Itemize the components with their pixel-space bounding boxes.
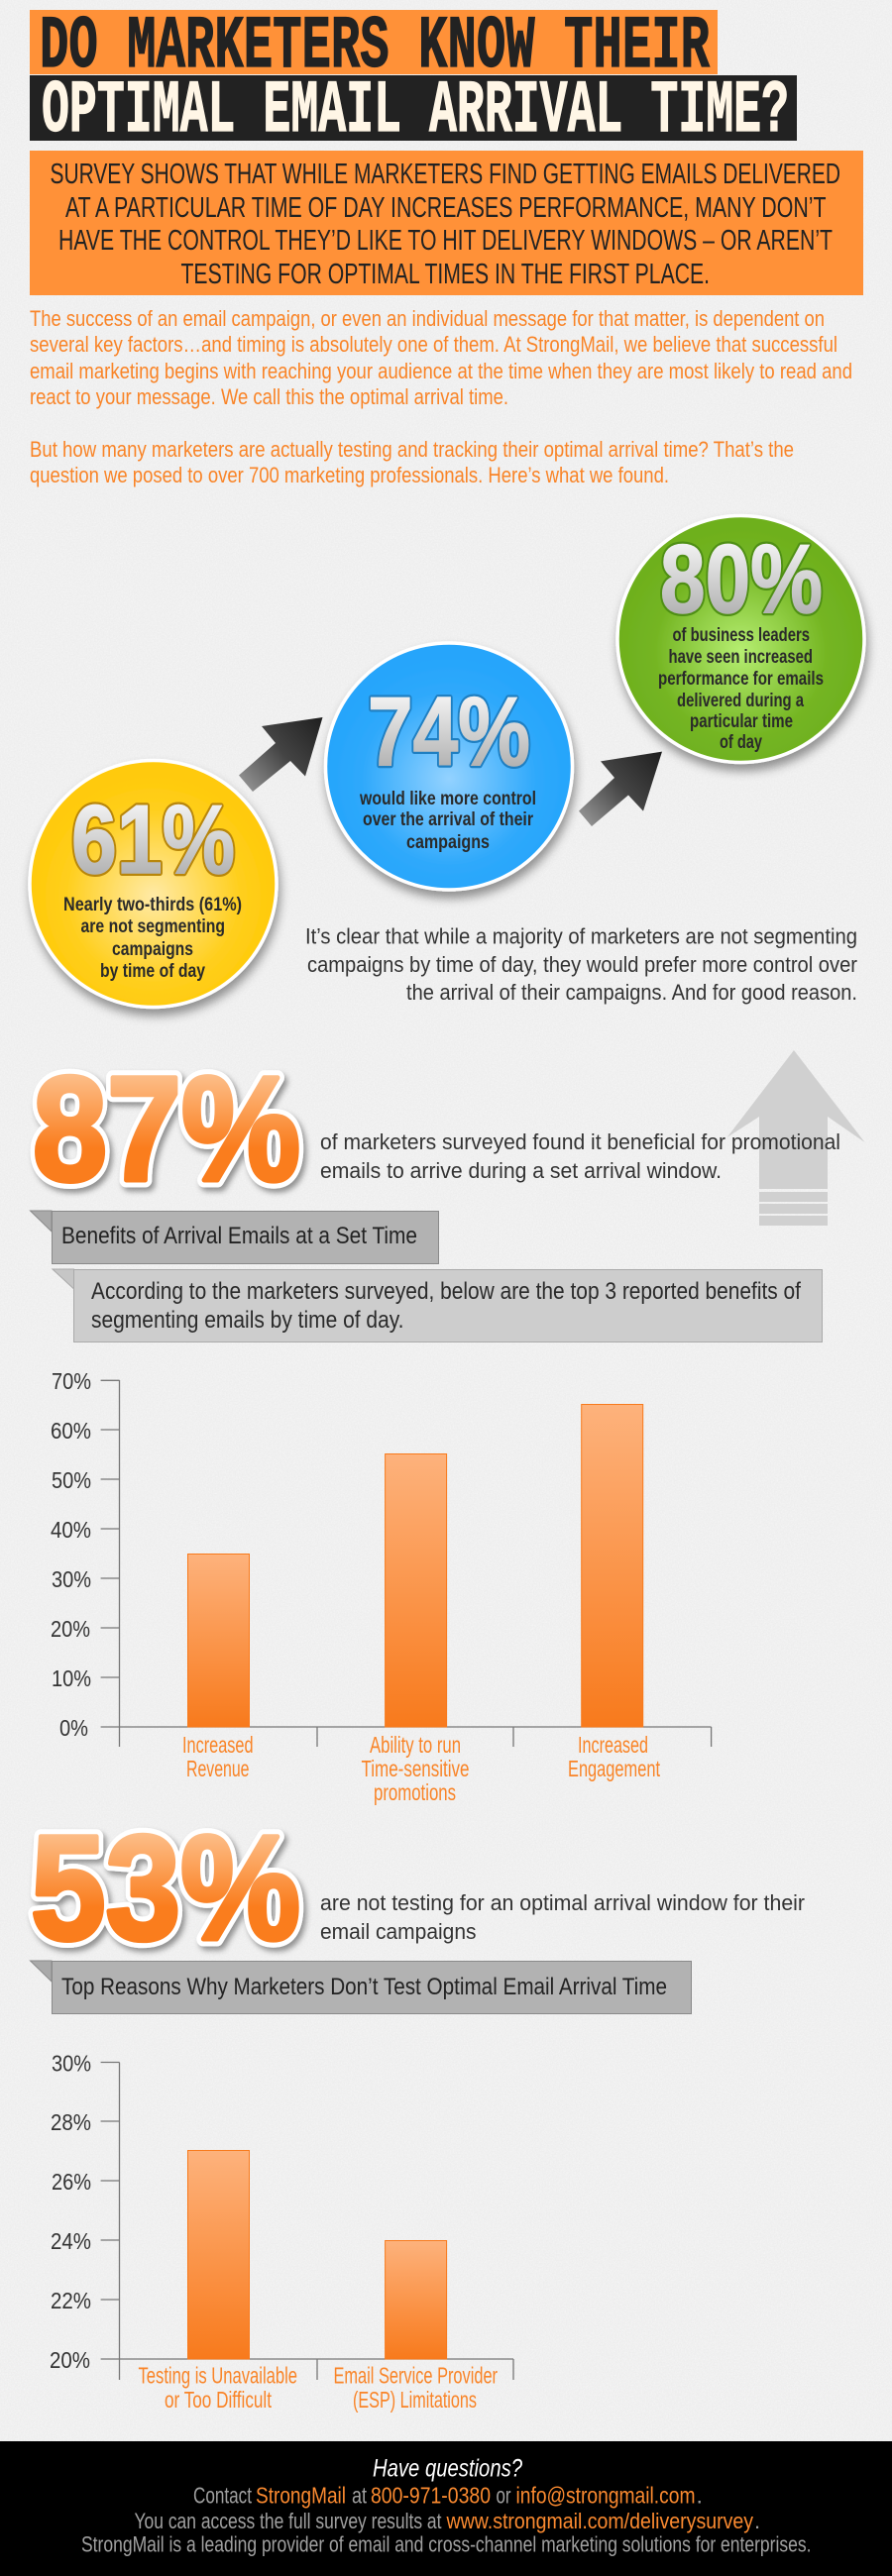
circle: 74%: over the arrival of their bbox=[363, 809, 534, 830]
bar: time-sensitive promotions 55% bbox=[386, 1454, 447, 1727]
intro text bbox=[30, 306, 852, 487]
y labels bbox=[50, 2051, 91, 2373]
arrow: blue to green bbox=[579, 752, 662, 826]
circle: 80%: of day bbox=[720, 732, 762, 753]
y labels: 40% bbox=[51, 1517, 91, 1543]
x labels: Ability to run bbox=[370, 1732, 461, 1758]
y labels: 30% bbox=[52, 1566, 91, 1592]
circle: 61%: 61% bbox=[71, 785, 235, 894]
footer bbox=[0, 2441, 892, 2576]
x labels: Engagement bbox=[568, 1756, 660, 1781]
y labels: 30% bbox=[52, 2051, 91, 2077]
intro text: question we posed to over 700 marketing professionals. Here’s what we found. bbox=[30, 463, 669, 487]
y labels: 28% bbox=[51, 2109, 91, 2135]
stat 53% text: are not testing for an optimal arrival window for their bbox=[320, 1890, 805, 1915]
title bbox=[30, 5, 797, 154]
stat: 53%: 53% bbox=[31, 1804, 300, 1971]
axes bbox=[101, 2063, 513, 2380]
ribbon text: according: segmenting emails by time of day. bbox=[91, 1307, 404, 1334]
footer survey line: www.strongmail.com/deliverysurvey bbox=[446, 2509, 753, 2533]
y labels: 50% bbox=[52, 1467, 91, 1493]
subtitle panel: TESTING FOR OPTIMAL TIMES IN THE FIRST PLACE. bbox=[180, 259, 710, 290]
bar chart: benefits bbox=[51, 1368, 712, 1805]
x labels: Time-sensitive bbox=[361, 1756, 470, 1781]
y labels bbox=[51, 1368, 91, 1741]
circle: 74%: 74% bbox=[368, 677, 530, 786]
footer contact line: StrongMail bbox=[256, 2483, 346, 2509]
subtitle panel bbox=[30, 151, 863, 295]
footer heading: Have questions? bbox=[373, 2455, 522, 2483]
x labels: Increased bbox=[182, 1732, 254, 1758]
x labels: Testing is Unavailable bbox=[139, 2362, 297, 2388]
bar: increased revenue 35% bbox=[188, 1554, 250, 1727]
intro text: react to your message. We call this the optimal arrival time. bbox=[30, 384, 508, 409]
footer contact line: Contact bbox=[193, 2483, 252, 2509]
axes bbox=[101, 1380, 712, 1747]
bar chart: reasons bbox=[50, 2051, 513, 2413]
stat: 87%: 87% bbox=[33, 1045, 300, 1212]
commentary text bbox=[305, 923, 857, 1005]
y labels: 20% bbox=[50, 2347, 90, 2373]
circle: 61%: campaigns bbox=[112, 939, 193, 960]
circle: 61%: are not segmenting bbox=[81, 916, 225, 937]
circle: 80%: 80% bbox=[660, 524, 823, 633]
ribbon text: according: According to the marketers surveyed, below are the top 3 reported benefits of bbox=[91, 1278, 801, 1305]
footer contact line: at bbox=[352, 2483, 367, 2509]
bar: ESP limitations 24% bbox=[386, 2241, 447, 2359]
y labels: 70% bbox=[52, 1368, 91, 1394]
x labels: promotions bbox=[374, 1779, 456, 1805]
bar: increased engagement 65% bbox=[582, 1405, 643, 1727]
footer survey line bbox=[135, 2509, 760, 2533]
bar: testing unavailable 27% bbox=[188, 2150, 250, 2359]
circle: 61%: 61% bbox=[71, 785, 235, 894]
footer survey line: . bbox=[754, 2509, 760, 2533]
circle: 80%: have seen increased bbox=[668, 647, 813, 668]
circle: 80%: 80% bbox=[660, 524, 823, 633]
stat: 53%: 53% bbox=[31, 1804, 300, 1971]
stat 87% text: emails to arrive during a set arrival window. bbox=[320, 1158, 722, 1183]
y labels: 24% bbox=[51, 2228, 91, 2254]
icon: grey up arrow bbox=[727, 1050, 865, 1226]
footer contact line: . bbox=[696, 2483, 703, 2509]
stat 87% text bbox=[320, 1129, 840, 1183]
circle: 74%: would like more control bbox=[359, 789, 536, 809]
x labels bbox=[182, 1732, 660, 1805]
circle: 74%: campaigns bbox=[406, 832, 490, 853]
circle: 74%: 74% bbox=[368, 677, 530, 786]
stat 53% text: email campaigns bbox=[320, 1919, 476, 1944]
circle: 80%: particular time bbox=[690, 711, 793, 732]
circle: 80%: delivered during a bbox=[677, 691, 804, 711]
commentary text: campaigns by time of day, they would prefer more control over bbox=[307, 952, 857, 977]
commentary text: It’s clear that while a majority of marketers are not segmenting bbox=[305, 923, 857, 949]
y labels: 26% bbox=[52, 2169, 91, 2195]
ribbon heading: top reasons: Top Reasons Why Marketers Don’t Test Optimal Email Arrival Time bbox=[61, 1974, 667, 2000]
x labels: (ESP) Limitations bbox=[353, 2387, 477, 2413]
footer contact line bbox=[193, 2483, 703, 2509]
circle: 80% bbox=[617, 515, 864, 763]
circle: 61%: Nearly two-thirds (61%) bbox=[63, 895, 242, 915]
arrow: yellow to blue bbox=[239, 717, 323, 792]
x labels: Revenue bbox=[186, 1756, 250, 1781]
ribbon heading: benefits: Benefits of Arrival Emails at a Set Time bbox=[61, 1223, 417, 1249]
x labels bbox=[139, 2362, 498, 2413]
ribbon heading: benefits bbox=[30, 1211, 438, 1264]
y labels: 10% bbox=[52, 1665, 91, 1691]
footer contact line: or bbox=[496, 2483, 511, 2509]
x labels: Increased bbox=[578, 1732, 648, 1758]
stat 53% text bbox=[320, 1890, 805, 1944]
x labels: Email Service Provider bbox=[333, 2362, 498, 2388]
circle: 74% bbox=[325, 643, 573, 890]
circle: 61% bbox=[30, 761, 277, 1007]
y labels: 60% bbox=[51, 1418, 91, 1444]
circle: 80%: of business leaders bbox=[672, 625, 810, 646]
stat 87% text: of marketers surveyed found it beneficial for promotional bbox=[320, 1129, 840, 1154]
y labels: 22% bbox=[51, 2288, 91, 2313]
footer contact line: info@strongmail.com bbox=[515, 2483, 696, 2509]
y labels: 0% bbox=[59, 1715, 88, 1741]
footer contact line: 800-971-0380 bbox=[371, 2483, 491, 2509]
commentary text: the arrival of their campaigns. And for good reason. bbox=[406, 980, 857, 1005]
circle: 80%: performance for emails bbox=[658, 669, 824, 690]
footer survey line: You can access the full survey results at bbox=[135, 2509, 442, 2533]
x labels: or Too Difficult bbox=[165, 2387, 272, 2413]
stat: 87%: 87% bbox=[33, 1045, 300, 1212]
ribbon heading: top reasons bbox=[30, 1961, 692, 2013]
y labels: 20% bbox=[51, 1616, 90, 1642]
circle: 61%: by time of day bbox=[100, 961, 205, 982]
ribbon text: according bbox=[53, 1269, 823, 1342]
